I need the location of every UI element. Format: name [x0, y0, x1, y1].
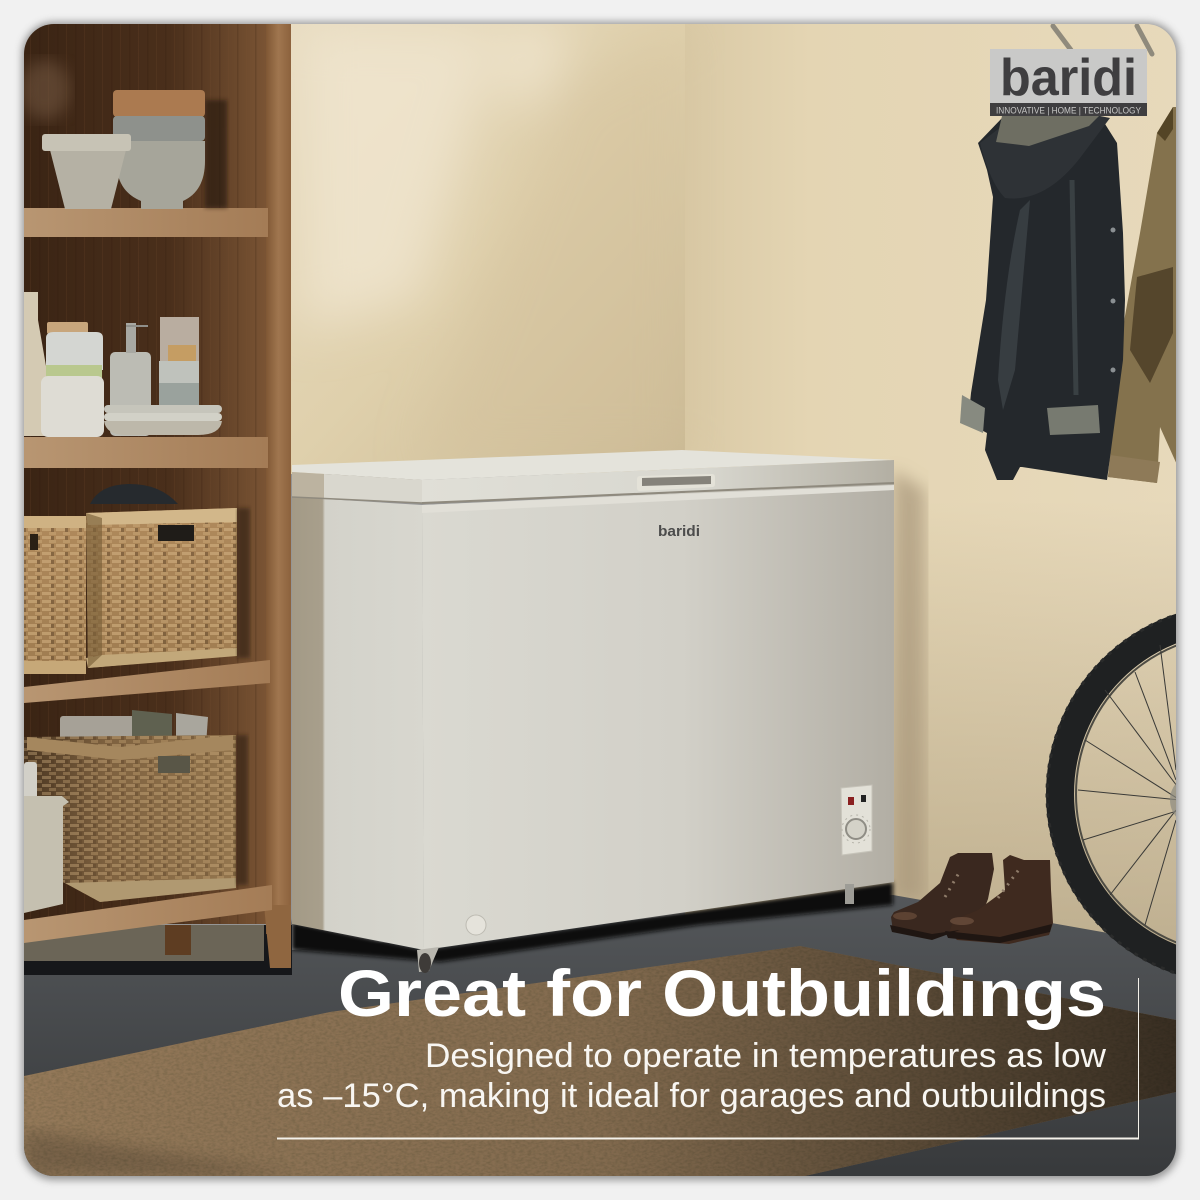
freezer lid top surface: [292, 450, 894, 480]
bottles and plates on second shelf: [24, 292, 222, 437]
caster wheels: [417, 884, 854, 973]
left boot: [891, 853, 994, 937]
ceramic pots on top shelf: [42, 90, 227, 209]
shelf foot: [165, 925, 191, 955]
wall hooks: [1053, 26, 1152, 54]
jacket hood: [980, 116, 1110, 198]
hood lining: [996, 116, 1099, 146]
logo tagline: INNOVATIVE | HOME | TECHNOLOGY: [996, 106, 1141, 116]
back wall left: [280, 24, 686, 474]
chest freezer: [292, 450, 894, 973]
control panel: [841, 785, 872, 855]
bookshelf: [20, 24, 292, 975]
back wall right: [685, 24, 1185, 954]
white cord basket: [24, 762, 69, 913]
dark area below bottom shelf: [24, 925, 292, 975]
shelf board 4: [24, 885, 272, 943]
brand mark on freezer: baridi: [658, 523, 700, 540]
baridi logo: [990, 49, 1147, 116]
shelf board 1: [24, 208, 268, 237]
shelf board 3: [24, 660, 270, 703]
rolled cuffs: [1047, 405, 1100, 435]
wicker basket and folded cloth on bottom shelf: [24, 710, 248, 913]
shelf board 2: [24, 437, 268, 468]
description line 1: Designed to operate in temperatures as low: [425, 1037, 1106, 1075]
freezer lid left side: [292, 472, 372, 498]
logo wordmark: baridi: [1000, 49, 1137, 107]
freezer lid gasket: [422, 485, 894, 513]
freezer front body: [422, 483, 894, 950]
freezer lid front: [422, 460, 894, 503]
drain cap: [466, 915, 486, 935]
frame lines around caption: [277, 978, 1139, 1139]
floor: [24, 895, 1176, 1190]
freezer cast shadow on the wall: [893, 470, 925, 900]
lid handle: [637, 474, 715, 491]
jute rug: [24, 940, 1176, 1180]
shadow beneath freezer: [292, 882, 893, 962]
wicker baskets on third shelf: [24, 484, 250, 674]
right boot: [949, 855, 1053, 944]
shelf back panel: [24, 24, 267, 924]
olive jacket: [1108, 107, 1178, 483]
description line 2: as –15°C, making it ideal for garages and outbuildings: [277, 1077, 1106, 1115]
shelf upright: [266, 24, 291, 934]
sunlight on the wall: [293, 24, 566, 330]
jacket fold highlights: [998, 200, 1030, 410]
bicycle wheel: [1046, 614, 1176, 974]
dark hooded jacket: [960, 116, 1125, 480]
freezer left side: [292, 497, 424, 950]
lower wall falloff: [685, 586, 1176, 944]
leather boots: [890, 853, 1053, 944]
heading: Great for Outbuildings: [338, 956, 1106, 1030]
